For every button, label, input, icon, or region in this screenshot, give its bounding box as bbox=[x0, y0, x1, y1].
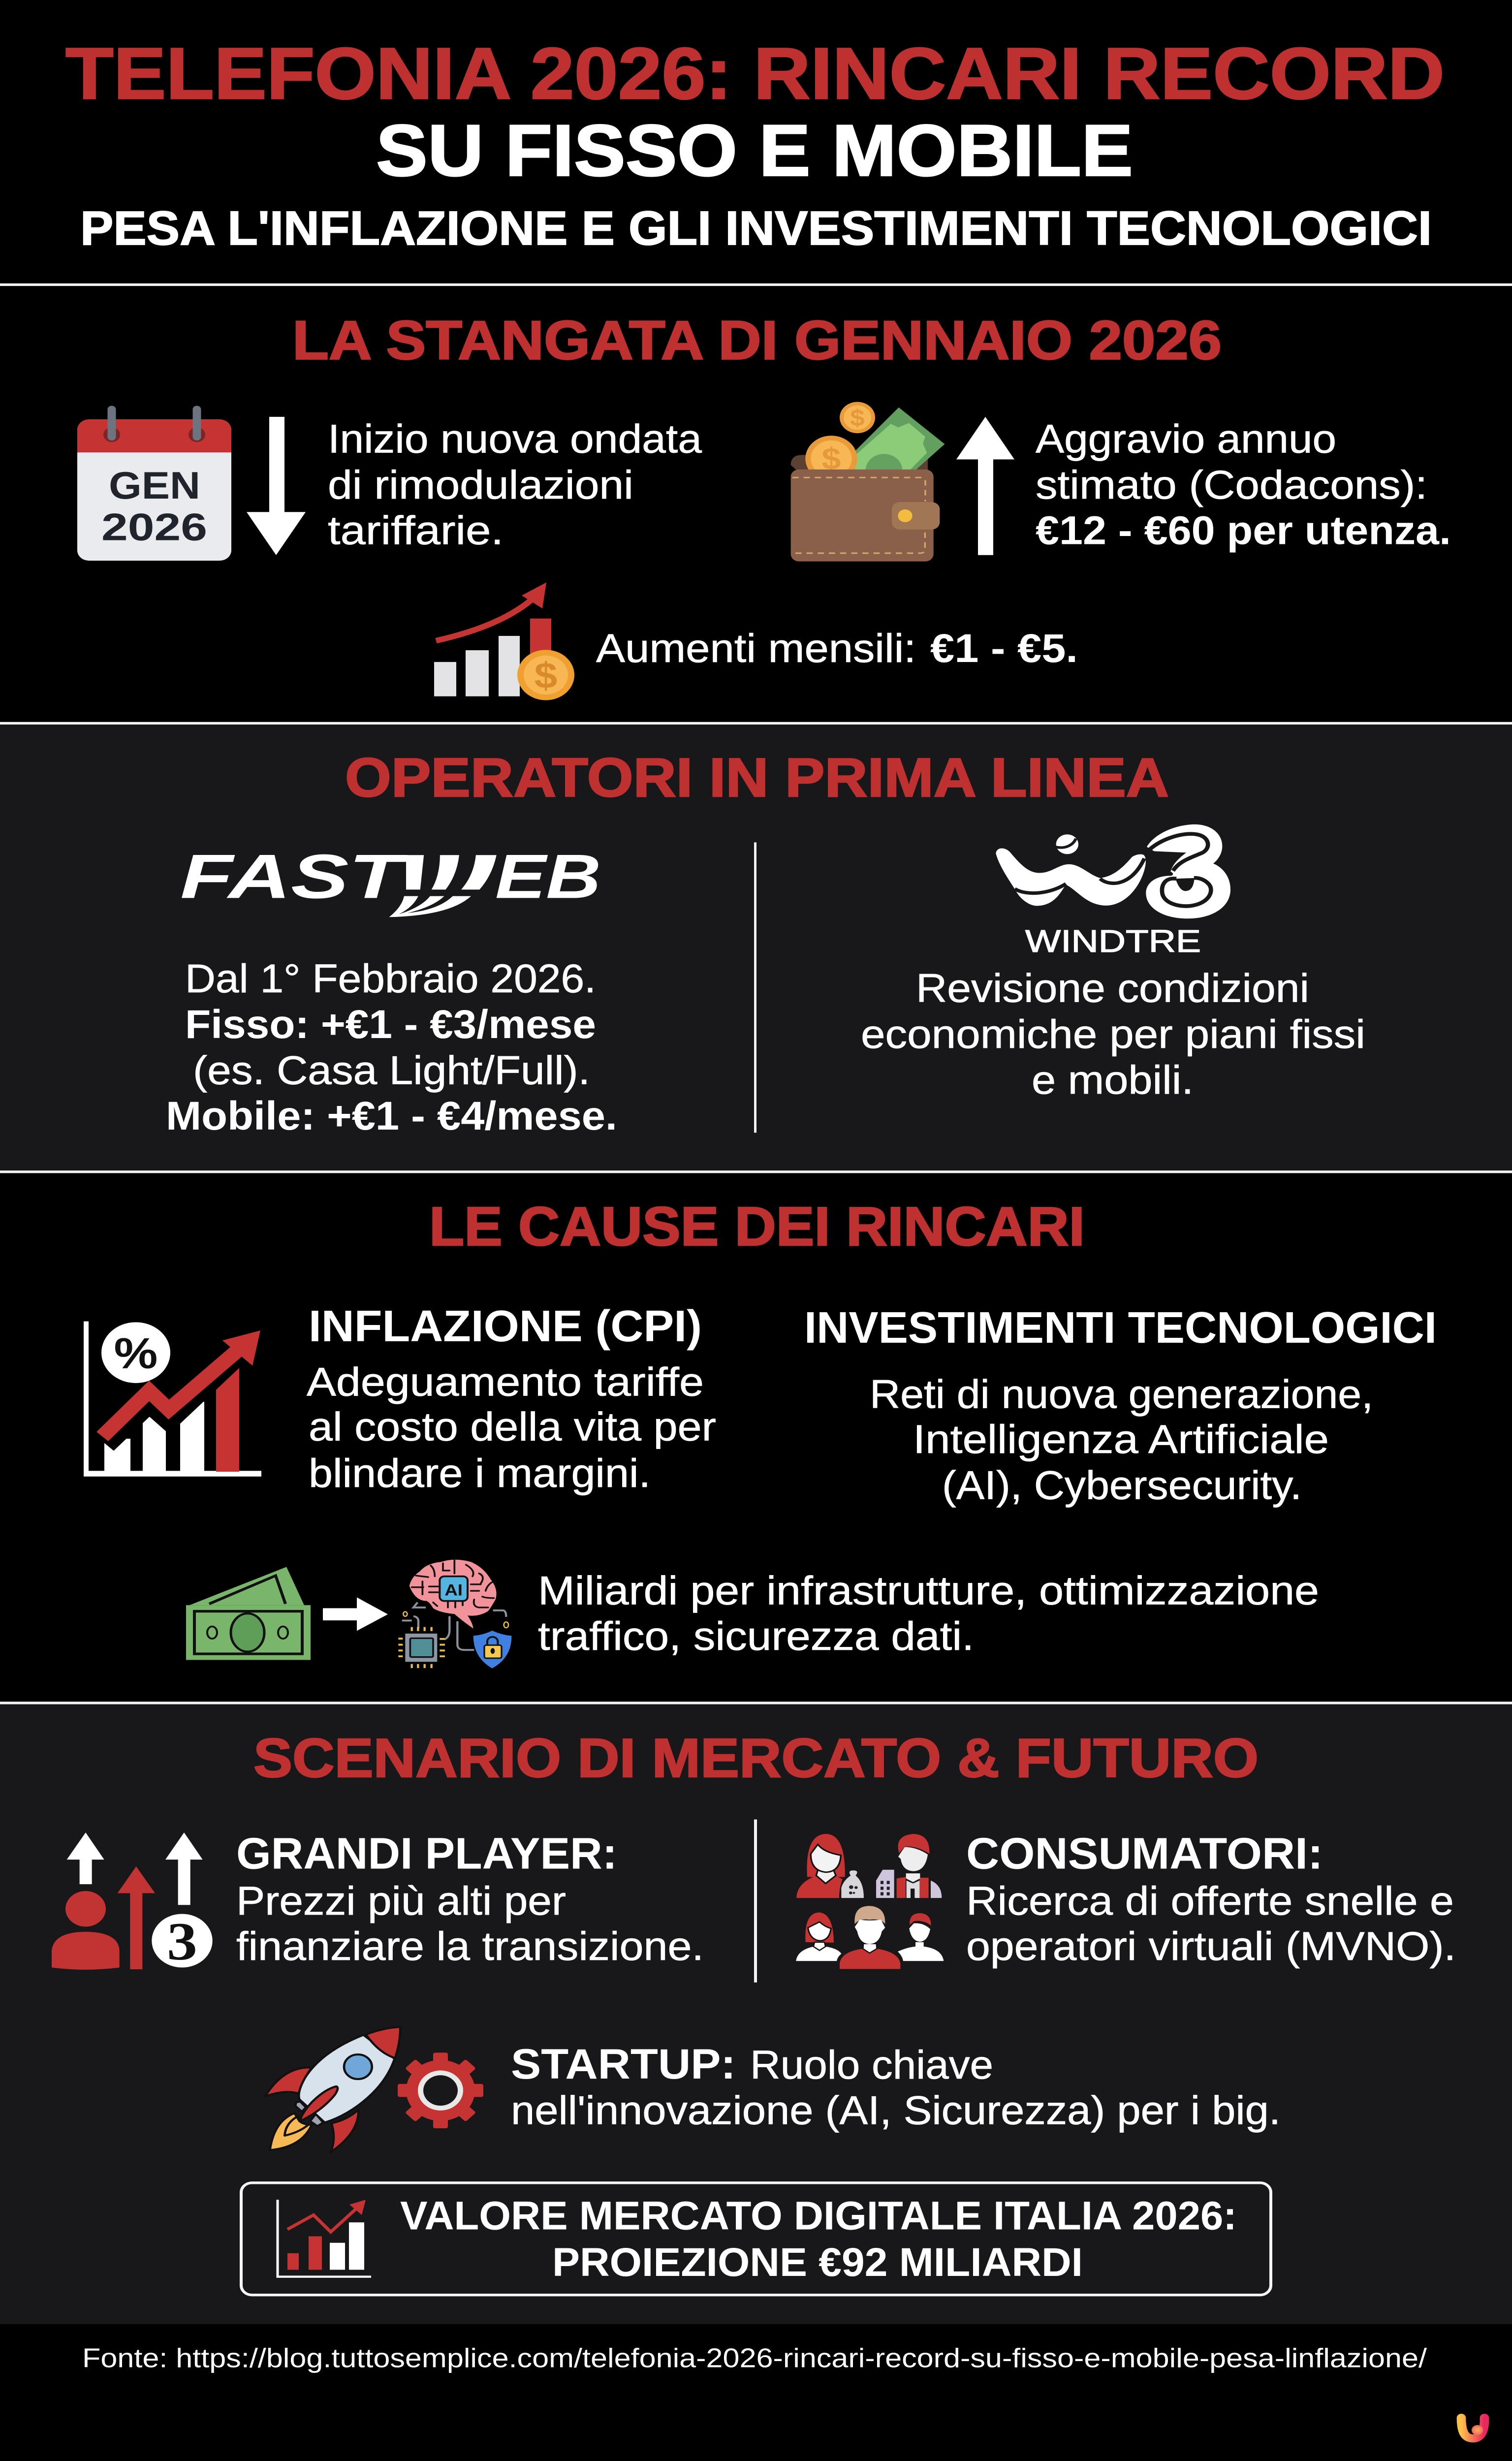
icon: big players price rise bbox=[52, 1832, 213, 1972]
text: grandi player: GRANDI PLAYER: bbox=[236, 1829, 617, 1878]
logo: windtre: WINDTRE bbox=[1025, 924, 1201, 959]
logo: brand mark bbox=[1461, 2418, 1484, 2438]
icon: gear bbox=[398, 2052, 483, 2128]
text: miliardi per infrastrutture bbox=[538, 1568, 1319, 1659]
text: aggravio annuo: €12 - €60 per utenza. bbox=[1036, 508, 1451, 553]
text: fastweb details bbox=[166, 956, 617, 1138]
text: startup: nell'innovazione (AI, Sicurezza) per i big. bbox=[511, 2088, 1281, 2133]
heading: le cause: LE CAUSE DEI RINCARI bbox=[429, 1196, 1085, 1257]
text: fastweb details: (es. Casa Light/Full). bbox=[193, 1048, 590, 1093]
text: windtre details: Revisione condizioni bbox=[916, 966, 1309, 1010]
text: aumenti mensili bbox=[596, 626, 1078, 671]
text: investimenti tecnologici: INVESTIMENTI TECNOLOGICI bbox=[804, 1303, 1437, 1352]
logo: fastweb bbox=[180, 841, 601, 917]
divider: operators bbox=[754, 842, 756, 1133]
text: grandi player bbox=[236, 1829, 704, 1969]
icon: rising bars with coin bbox=[434, 582, 574, 700]
icon: rocket bbox=[265, 2027, 400, 2152]
panel: la stangata di gennaio bbox=[77, 310, 1451, 700]
text: consumatori bbox=[966, 1829, 1456, 1969]
text: grandi player: Prezzi più alti per bbox=[236, 1879, 566, 1924]
icon: wallet with money bbox=[791, 402, 945, 562]
text: fastweb details: Fisso: +€1 - €3/mese bbox=[185, 1002, 596, 1047]
icon: wallet with money: $ bbox=[822, 442, 841, 476]
heading: scenario: SCENARIO DI MERCATO & FUTURO bbox=[253, 1728, 1259, 1789]
title line 1: TELEFONIA 2026: RINCARI RECORD bbox=[65, 33, 1445, 114]
icon: inflation chart: % bbox=[114, 1329, 158, 1378]
text: windtre details bbox=[861, 966, 1365, 1103]
text: investimenti tecnologici bbox=[804, 1303, 1437, 1508]
panel: operatori in prima linea bbox=[166, 747, 1365, 1138]
text: aggravio annuo: stimato (Codacons): bbox=[1036, 463, 1427, 507]
text: windtre details: economiche per piani fissi bbox=[861, 1012, 1365, 1057]
icon: calendar: GEN bbox=[109, 464, 200, 507]
icon: AI brain, chip and shield bbox=[398, 1560, 511, 1669]
text: aumenti mensili: €1 - €5. bbox=[930, 626, 1078, 671]
icon: rising bars with coin: $ bbox=[535, 655, 557, 696]
text: investimenti tecnologici: Intelligenza Artificiale bbox=[913, 1417, 1329, 1462]
arrow: down bbox=[247, 417, 306, 555]
arrow: money to tech bbox=[323, 1597, 388, 1631]
text: valore mercato digitale bbox=[400, 2193, 1237, 2285]
text: inflazione bbox=[307, 1302, 716, 1496]
icon: calendar bbox=[77, 410, 231, 561]
text: inflazione: blindare i margini. bbox=[309, 1451, 651, 1496]
text: inizio nuova ondata: tariffarie. bbox=[328, 508, 504, 553]
text: miliardi per infrastrutture: Miliardi per infrastrutture, ottimizzazione bbox=[538, 1568, 1319, 1613]
text: fastweb details: Dal 1° Febbraio 2026. bbox=[185, 956, 596, 1001]
text: startup bbox=[511, 2040, 1281, 2133]
logo: windtre bbox=[996, 824, 1230, 959]
callout: digital market value bbox=[241, 2183, 1271, 2295]
text: inizio nuova ondata bbox=[328, 416, 702, 553]
icon: big players price rise: 3 bbox=[167, 1912, 197, 1972]
icon: banknotes bbox=[186, 1567, 311, 1660]
text: consumatori: operatori virtuali (MVNO). bbox=[966, 1924, 1456, 1969]
heading: la stangata: LA STANGATA DI GENNAIO 2026 bbox=[292, 310, 1222, 371]
text: windtre details: e mobili. bbox=[1032, 1058, 1194, 1103]
text: grandi player: finanziare la transizione. bbox=[236, 1924, 704, 1969]
text: aumenti mensili: Aumenti mensili: bbox=[596, 626, 916, 671]
text: aggravio annuo bbox=[1036, 416, 1451, 553]
text: inizio nuova ondata: Inizio nuova ondata bbox=[328, 416, 702, 461]
text: inflazione: Adeguamento tariffe bbox=[307, 1360, 704, 1404]
icon: market chart bbox=[278, 2200, 371, 2277]
text: fastweb details: Mobile: +€1 - €4/mese. bbox=[166, 1094, 617, 1138]
text: investimenti tecnologici: Reti di nuova generazione, bbox=[870, 1372, 1373, 1417]
title line 2: SU FISSO E MOBILE bbox=[376, 110, 1133, 191]
icon: AI brain, chip and shield: AI bbox=[444, 1581, 463, 1599]
subtitle: PESA L'INFLAZIONE E GLI INVESTIMENTI TECNOLOGICI bbox=[80, 201, 1432, 255]
icon: calendar: 2026 bbox=[101, 505, 207, 549]
text: valore mercato digitale: PROIEZIONE €92 MILIARDI bbox=[552, 2240, 1083, 2285]
text: consumatori: Ricerca di offerte snelle e bbox=[966, 1879, 1454, 1924]
logo: fastweb: FAST bbox=[180, 841, 408, 912]
logo: fastweb: EB bbox=[495, 841, 601, 912]
text: startup: Ruolo chiave bbox=[750, 2043, 993, 2087]
icon: consumers bbox=[796, 1834, 944, 1969]
text: consumatori: CONSUMATORI: bbox=[966, 1829, 1323, 1878]
text: aggravio annuo: Aggravio annuo bbox=[1036, 416, 1336, 461]
panel: title header bbox=[65, 33, 1445, 255]
text: investimenti tecnologici: (AI), Cybersecurity. bbox=[942, 1463, 1302, 1508]
source footer: Fonte: https://blog.tuttosemplice.com/telefonia-2026-rincari-record-su-fisso-e-mobile-pesa-linflazione/ bbox=[82, 2343, 1427, 2373]
icon: wallet with money: $ bbox=[850, 405, 865, 431]
text: inflazione: al costo della vita per bbox=[309, 1405, 716, 1449]
icon: inflation chart bbox=[84, 1322, 261, 1477]
panel: le cause dei rincari bbox=[84, 1196, 1437, 1669]
divider: market bbox=[754, 1820, 757, 1983]
heading: operatori: OPERATORI IN PRIMA LINEA bbox=[345, 747, 1169, 808]
panel: scenario di mercato e futuro bbox=[52, 1728, 1456, 2295]
text: inflazione: INFLAZIONE (CPI) bbox=[309, 1302, 702, 1351]
text: miliardi per infrastrutture: traffico, sicurezza dati. bbox=[538, 1614, 974, 1659]
arrow: up bbox=[956, 417, 1014, 555]
text: valore mercato digitale: VALORE MERCATO DIGITALE ITALIA 2026: bbox=[400, 2193, 1237, 2238]
text: inizio nuova ondata: di rimodulazioni bbox=[328, 463, 633, 507]
text: startup: STARTUP: bbox=[511, 2040, 736, 2088]
